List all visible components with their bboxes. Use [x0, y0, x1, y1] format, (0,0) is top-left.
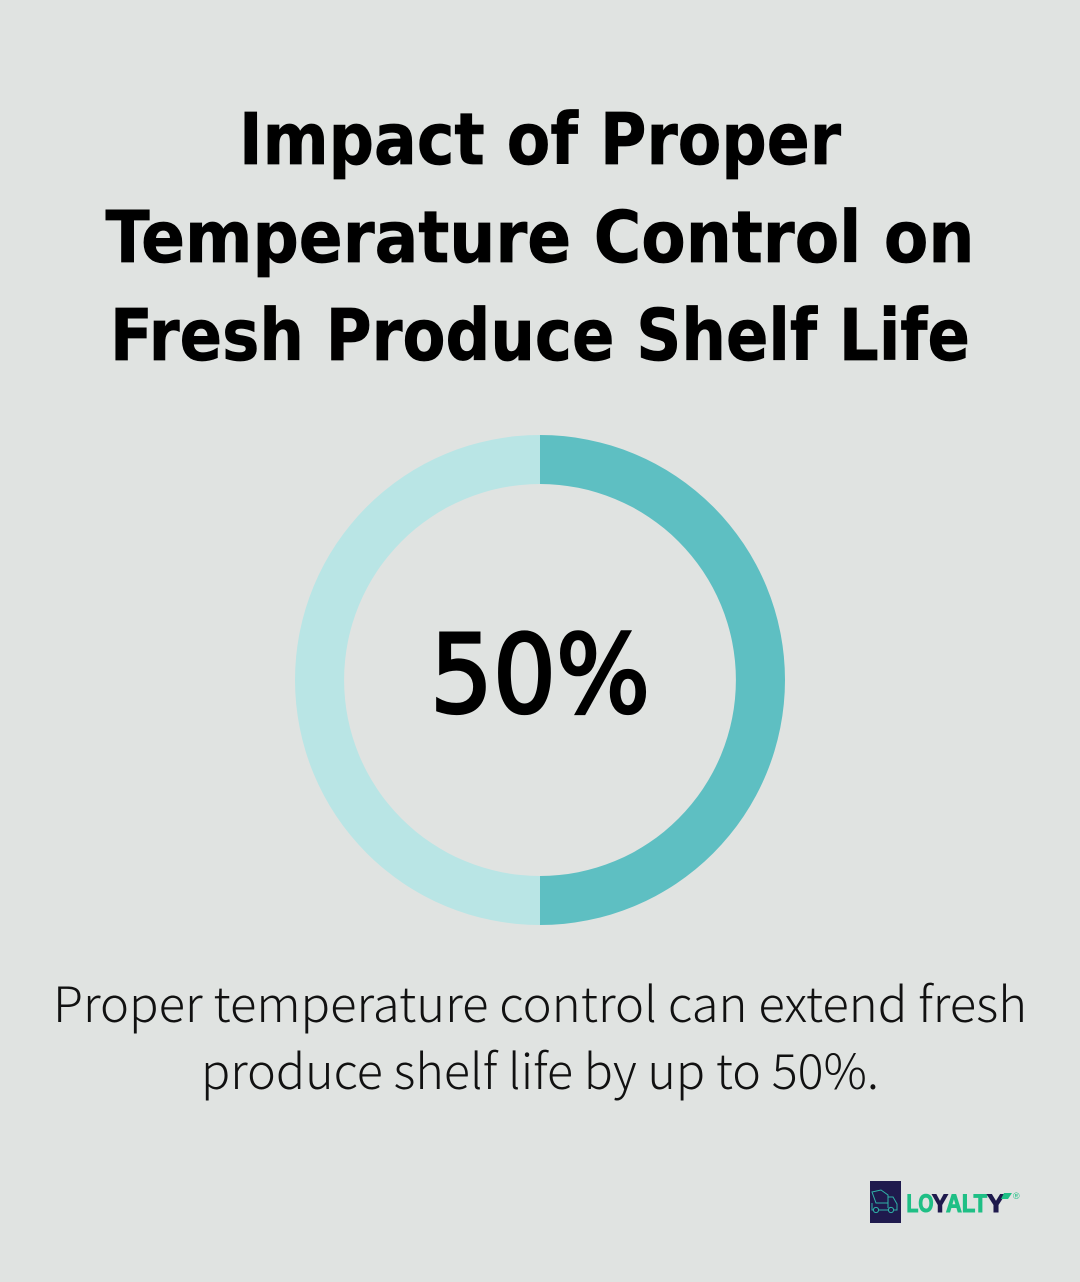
- description text: Proper temperature control can extend fresh: [53, 966, 1027, 1036]
- logo wordmark: ®: [1013, 1191, 1020, 1201]
- logo wordmark: Y: [987, 1190, 1005, 1218]
- title: Fresh Produce Shelf Life: [110, 294, 970, 377]
- highlighted ring segment: [540, 435, 785, 925]
- title: Impact of Proper: [239, 98, 842, 181]
- logo wordmark: ALT: [946, 1190, 987, 1218]
- center value: 50%: [430, 613, 650, 738]
- logo: [870, 1181, 1020, 1223]
- logo icon: truck: [870, 1181, 901, 1223]
- logo wordmark: [906, 1190, 1020, 1218]
- remaining ring segment: [295, 435, 540, 925]
- title: Temperature Control on: [106, 196, 974, 279]
- title: [106, 98, 974, 377]
- logo wordmark: Y: [932, 1190, 948, 1218]
- logo wordmark: LO: [906, 1190, 934, 1218]
- description text: produce shelf life by up to 50%.: [201, 1033, 879, 1103]
- donut chart: 50%: [295, 435, 785, 925]
- description text: [53, 966, 1027, 1103]
